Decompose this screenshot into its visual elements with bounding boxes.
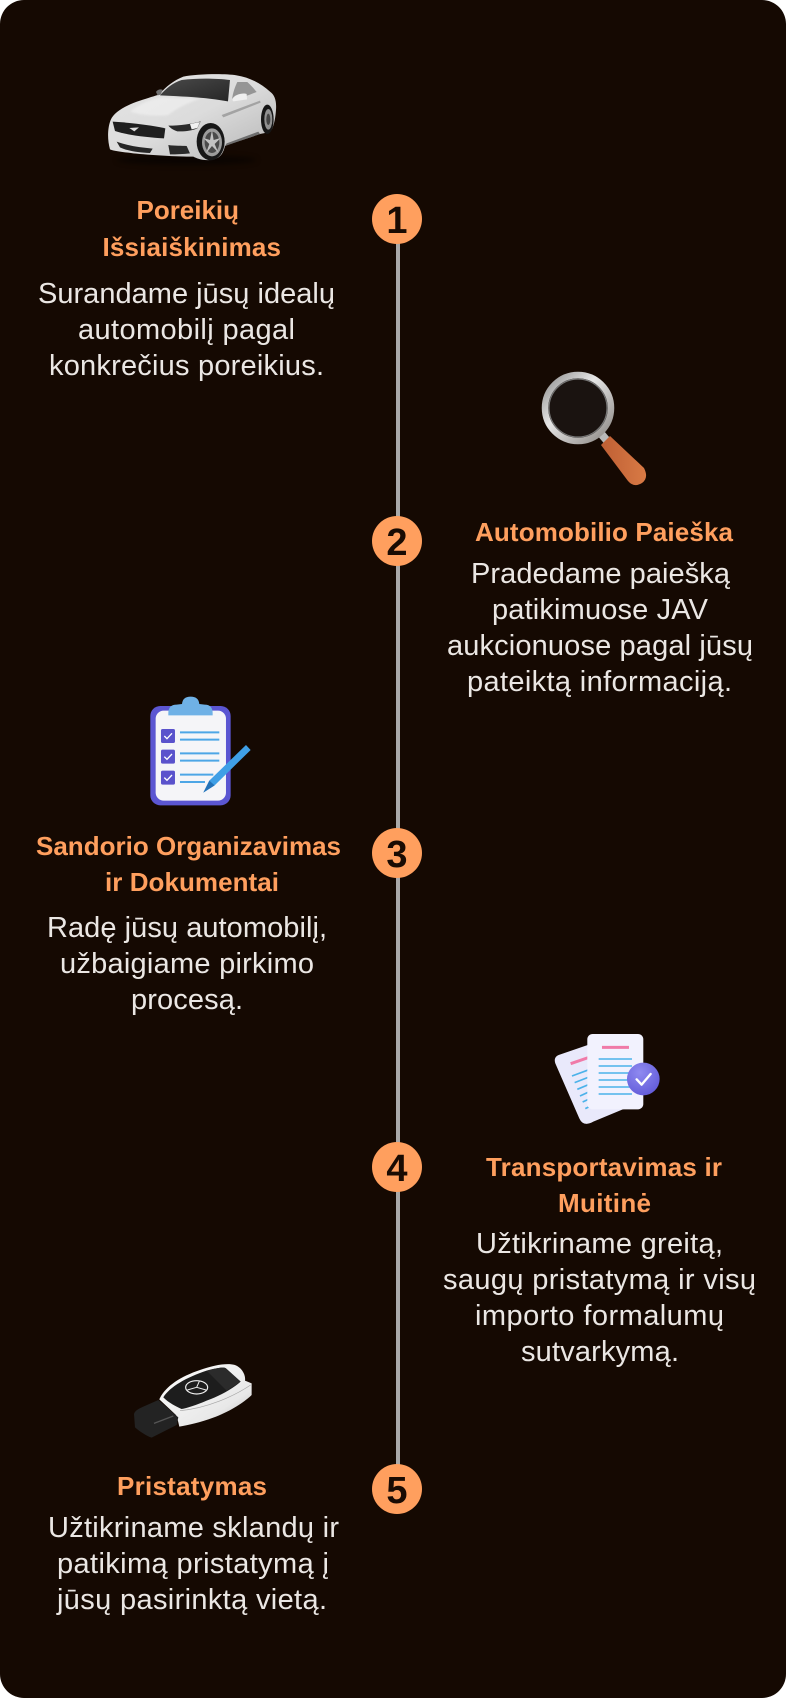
text: delivery description: jūsų pasirinktą vietą. (56, 1584, 327, 1616)
number badge 4 (372, 1142, 422, 1192)
step 1: needs (38, 74, 422, 382)
step 2: search (372, 375, 753, 698)
text: search description: pateiktą informaciją. (467, 666, 732, 698)
icon: white car (108, 74, 276, 165)
step 5: delivery (48, 1364, 422, 1616)
heading: search: Automobilio Paieška (475, 517, 734, 547)
icon: documents with check badge (555, 1034, 660, 1124)
step 4: transport and customs (372, 1034, 756, 1368)
text: search description: Pradedame paiešką (471, 558, 731, 590)
heading: deal and documents (36, 831, 341, 897)
text: delivery description: Užtikriname sklandų ir (48, 1512, 339, 1544)
text: search description (447, 558, 753, 698)
icon: clipboard with pencil (150, 697, 251, 805)
number badge 5 (372, 1464, 422, 1514)
text: deal description: procesą. (131, 984, 243, 1016)
icon: magnifying glass (545, 375, 646, 485)
number badge 3: 3 (386, 834, 408, 876)
text: search description: patikimuose JAV (492, 594, 709, 626)
text: needs description (38, 278, 335, 382)
icon: car key fob (134, 1364, 252, 1438)
number badge 5: 5 (386, 1470, 408, 1512)
text: delivery description (48, 1512, 339, 1616)
text: needs description: automobilį pagal (78, 314, 295, 346)
text: needs description: konkrečius poreikius. (49, 350, 324, 382)
heading: delivery: Pristatymas (117, 1471, 267, 1501)
text: needs description: Surandame jūsų idealų (38, 278, 335, 310)
heading: transport and customs (486, 1152, 722, 1218)
text: deal description: Radę jūsų automobilį, (47, 912, 327, 944)
number badge 2: 2 (386, 522, 408, 564)
text: search description: aukcionuose pagal jūsų (447, 630, 753, 662)
text: transport description: Užtikriname greitą, (476, 1228, 723, 1260)
number badge 1: 1 (386, 200, 408, 242)
text: transport description: sutvarkymą. (521, 1336, 679, 1368)
heading: needs: Poreikių (136, 195, 239, 225)
text: deal description (47, 912, 327, 1016)
heading: needs (102, 195, 281, 262)
step 3: deal and documents (36, 697, 422, 1016)
text: transport description: saugų pristatymą ir visų (443, 1264, 756, 1296)
text: transport description: importo formalumų (475, 1300, 724, 1332)
text: transport description (443, 1228, 756, 1368)
heading: transport and customs: Muitinė (558, 1188, 651, 1218)
timeline line (396, 219, 400, 1489)
text: deal description: užbaigiame pirkimo (60, 948, 314, 980)
text: delivery description: patikimą pristatymą į (57, 1548, 329, 1580)
number badge 2 (372, 516, 422, 566)
heading: transport and customs: Transportavimas ir (486, 1152, 722, 1182)
number badge 3 (372, 828, 422, 878)
heading: deal and documents: ir Dokumentai (105, 867, 279, 897)
number badge 1 (372, 194, 422, 244)
heading: deal and documents: Sandorio Organizavimas (36, 831, 341, 861)
heading: needs: Išsiaiškinimas (102, 232, 281, 262)
number badge 4: 4 (386, 1148, 408, 1190)
